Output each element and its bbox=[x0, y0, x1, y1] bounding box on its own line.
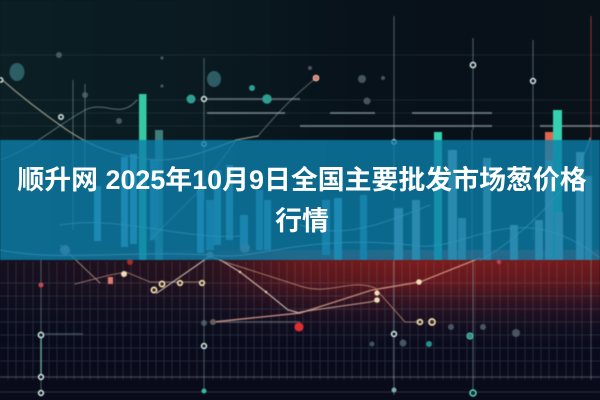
data point markers bbox=[0, 52, 535, 396]
cream ring dots bbox=[151, 281, 435, 325]
bar chart: columns bbox=[94, 94, 592, 260]
faded blobs bbox=[10, 63, 221, 87]
trend curves bbox=[0, 78, 600, 322]
horizontal highlight bars bbox=[45, 99, 600, 334]
title bbox=[17, 165, 587, 236]
title: 顺升网 2025年10月9日全国主要批发市场葱价格 bbox=[17, 165, 587, 195]
title: 行情 bbox=[275, 206, 329, 236]
translucent blue band bbox=[0, 140, 600, 260]
ring dots bbox=[0, 62, 535, 395]
teal dots bbox=[186, 85, 272, 104]
